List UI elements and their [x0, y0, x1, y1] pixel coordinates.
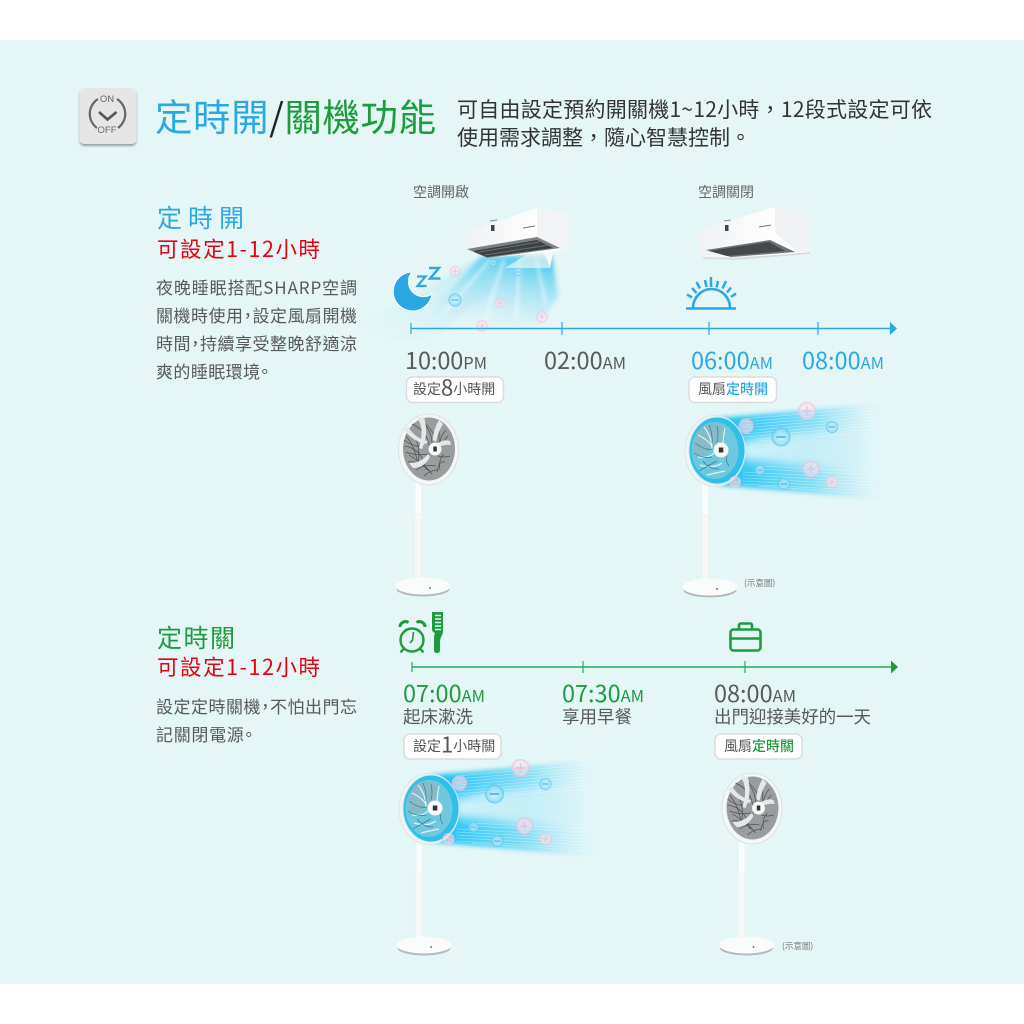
- heading: timer off: 定時關: [157, 619, 235, 655]
- timeline: timer off: [412, 660, 898, 674]
- cool air from AC: [358, 256, 558, 345]
- body text: 時間，持續享受整晚舒適涼: [156, 330, 357, 355]
- icon: moon and zzz: [393, 268, 440, 311]
- note: illustration: (示意圖): [744, 577, 775, 589]
- time 07:00 wake up: 起床漱洗: [403, 704, 473, 729]
- fan: on at 7am with air flow: [396, 759, 600, 956]
- body text: 設定定時關機，不怕出門忘: [156, 693, 357, 718]
- subtitle: [457, 94, 932, 152]
- body text: [156, 274, 357, 383]
- time 10:00 PM: 10:00PM: [405, 342, 487, 376]
- pill: set 1 hour: 1: [441, 728, 453, 760]
- icon: on off timer button: ON: [100, 94, 114, 105]
- pill: set 8 hours: 小時開: [453, 379, 495, 399]
- pill: set 1 hour: 設定: [413, 736, 441, 756]
- time labels: timer on: [405, 342, 884, 376]
- time labels: timer off: [403, 675, 871, 729]
- title: 定時開/關機功能: [155, 87, 436, 142]
- subtitle: 使用需求調整，隨心智慧控制。: [457, 122, 751, 152]
- label: AC on: 空調開啟: [413, 182, 469, 202]
- time 07:00 wake up: [403, 675, 485, 729]
- time 07:00 wake up: 07:00AM: [403, 675, 485, 709]
- subtitle: 可自由設定預約開關機1~12小時，12段式設定可依: [457, 94, 932, 124]
- panel: timer on description: [156, 199, 357, 383]
- icon: alarm clock: [400, 622, 425, 652]
- time 02:00 AM: 02:00AM: [544, 342, 626, 376]
- icon: on off timer button: [80, 88, 136, 144]
- body text: 夜晚睡眠搭配SHARP空調: [156, 274, 357, 299]
- pill: fan timer on: [689, 377, 776, 402]
- ion bubbles around AC: [448, 259, 548, 332]
- pill: fan timer off: [715, 734, 802, 759]
- pill: set 8 hours: 8: [441, 370, 453, 402]
- time 07:30 breakfast: [562, 675, 644, 729]
- timeline: timer on: [410, 322, 897, 335]
- fan: off at 8am: [719, 773, 782, 956]
- time 08:00 leave home: [714, 675, 871, 729]
- icon: sunrise: [686, 277, 736, 308]
- pill: fan timer on: 風扇定時開: [698, 379, 768, 399]
- AC unit on: [465, 208, 570, 268]
- heading: timer on: 定時開: [157, 199, 250, 235]
- AC unit off: [697, 207, 810, 259]
- icon: on off timer button: OFF: [98, 125, 117, 136]
- time 08:00 leave home: 08:00AM: [714, 675, 796, 709]
- body text: 關機時使用，設定風扇開機: [156, 302, 357, 327]
- body text: 記關閉電源。: [156, 721, 253, 746]
- pill: set 8 hours: 設定: [413, 379, 441, 399]
- label: AC off: 空調關閉: [698, 182, 754, 202]
- pill: set 1 hour: 小時關: [453, 736, 495, 756]
- pill: set 8 hours: [406, 370, 504, 402]
- time 07:30 breakfast: 享用早餐: [562, 704, 632, 729]
- AC labels: [413, 182, 754, 202]
- body text: 爽的睡眠環境。: [156, 358, 269, 383]
- time 07:30 breakfast: 07:30AM: [562, 675, 644, 709]
- subheading: 可設定1-12小時: [157, 233, 320, 264]
- pill: fan timer off: 風扇定時關: [724, 736, 794, 756]
- time 06:00 AM: 06:00AM: [691, 342, 773, 376]
- body text: [156, 693, 357, 746]
- icon: briefcase: [730, 624, 760, 650]
- panel: timer off description: [156, 619, 357, 746]
- time 08:00 AM: 08:00AM: [802, 342, 884, 376]
- note: illustration: (示意圖): [782, 940, 813, 952]
- fan: on at 6am with air flow: [682, 402, 886, 598]
- pill: set 1 hour: [404, 728, 501, 760]
- header: [80, 87, 932, 152]
- subheading: 可設定1-12小時: [157, 651, 320, 682]
- time 08:00 leave home: 出門迎接美好的一天: [714, 704, 871, 729]
- fan: off at 10pm: [396, 414, 458, 596]
- icon: toothbrush: [432, 612, 443, 653]
